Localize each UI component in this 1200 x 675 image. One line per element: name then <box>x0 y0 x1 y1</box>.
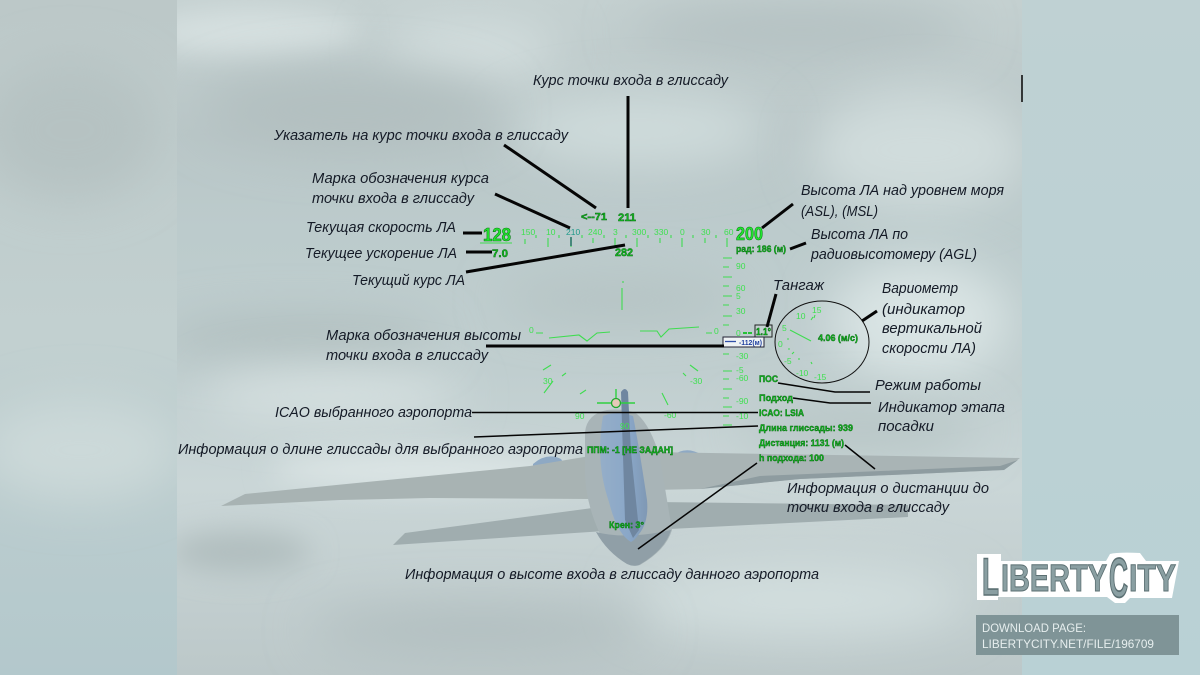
HUD: pitch ladder: 90 <box>736 261 746 271</box>
HUD: flight path marker <box>597 389 635 408</box>
HUD: readouts: 7.0 <box>492 248 508 260</box>
HUD: readouts: 282 <box>615 247 633 259</box>
annotation labels: скорости ЛА) <box>882 340 976 357</box>
annotation labels: точки входа в глиссаду <box>312 190 475 207</box>
annotation labels: Указатель на курс точки входа в глиссаду <box>273 127 569 144</box>
annotation labels: ICAO выбранного аэропорта <box>275 404 472 421</box>
variometer gauge: 0 <box>778 339 783 349</box>
HUD: pitch ladder: 5 <box>736 291 741 301</box>
HUD: pitch ladder: -10 <box>736 411 749 421</box>
HUD: readouts: <--71 <box>581 211 607 223</box>
variometer gauge: 10 <box>796 311 806 321</box>
HUD: heading tape: 210 <box>566 227 580 237</box>
download page box: DOWNLOAD PAGE: <box>982 621 1086 635</box>
HUD: readouts: 200 <box>736 224 763 244</box>
HUD: artificial horizon: -60 <box>664 410 677 420</box>
logo: LibertyCity <box>977 546 1179 609</box>
download page box <box>976 615 1179 655</box>
HUD: heading tape: 30 <box>701 227 711 237</box>
HUD: artificial horizon: 30 <box>543 376 553 386</box>
pitch readout box: 1.1° <box>756 327 771 338</box>
background: cloudy sky <box>140 0 1030 675</box>
annotation labels: Тангаж <box>773 277 825 294</box>
HUD: pitch ladder: 30 <box>736 306 746 316</box>
HUD: pitch ladder: 0 <box>736 328 741 338</box>
left wing <box>221 456 590 506</box>
HUD: heading tape: 240 <box>588 227 602 237</box>
annotation labels: Высота ЛА по <box>811 226 908 243</box>
HUD: heading tape: 0 <box>680 227 685 237</box>
annotation labels: Информация о дистанции до <box>787 480 989 497</box>
fuselage <box>585 410 672 566</box>
HUD: readouts: 211 <box>618 212 636 224</box>
logo: LibertyCity: L <box>982 548 999 607</box>
entry altitude marker box <box>723 337 764 347</box>
annotation labels: Текущая скорость ЛА <box>306 219 456 236</box>
annotation labels: Индикатор этапа <box>878 399 1005 416</box>
HUD: heading tape: 10 <box>546 227 556 237</box>
tail wing <box>393 507 605 545</box>
annotation labels <box>178 72 1005 583</box>
variometer gauge: 5 <box>782 323 787 333</box>
logo: LibertyCity: ITY <box>1129 558 1176 600</box>
fuselage blue panel <box>600 413 647 542</box>
entry altitude marker box: -112(м) <box>739 338 762 347</box>
annotation labels: точки входа в глиссаду <box>787 499 950 516</box>
HUD: pitch ladder: -60 <box>736 373 749 383</box>
annotation labels: Высота ЛА над уровнем моря <box>801 182 1004 199</box>
HUD: artificial horizon: 0 <box>714 326 719 336</box>
HUD: artificial horizon: 90 <box>575 411 585 421</box>
HUD: heading tape: 60 <box>724 227 734 237</box>
HUD: artificial horizon <box>529 281 719 431</box>
HUD: artificial horizon: 0 <box>529 325 534 335</box>
background: blurred side bands <box>0 0 177 675</box>
HUD: heading tape: 300 <box>632 227 646 237</box>
annotation labels: (ASL), (MSL) <box>801 203 878 220</box>
HUD: heading tape: 150 <box>521 227 535 237</box>
HUD: pitch ladder: -30 <box>736 351 749 361</box>
HUD: readouts: Дистанция: 1131 (м) <box>759 438 844 449</box>
annotation labels: Вариометр <box>882 280 958 297</box>
pitch readout box <box>743 325 772 338</box>
download page box: LIBERTYCITY.NET/FILE/196709 <box>982 637 1154 651</box>
HUD: heading tape: 330 <box>654 227 668 237</box>
logo: LibertyCity: C <box>1109 546 1128 609</box>
HUD: readouts: Подход <box>759 393 793 404</box>
HUD: readouts: 128 <box>483 225 511 245</box>
variometer gauge: -15 <box>814 372 827 382</box>
annotation labels: Марка обозначения высоты <box>326 327 521 344</box>
variometer gauge: -10 <box>796 368 809 378</box>
HUD: pitch ladder <box>723 258 749 425</box>
annotation labels: вертикальной <box>882 320 983 337</box>
annotation labels: Текущее ускорение ЛА <box>305 245 457 262</box>
annotation labels: Курс точки входа в глиссаду <box>533 72 729 89</box>
annotation labels: радиовысотомеру (AGL) <box>810 246 977 263</box>
annotation labels: посадки <box>878 418 935 435</box>
airplane seen from behind <box>221 389 1020 566</box>
annotation labels: (индикатор <box>882 301 965 318</box>
HUD: readouts: Крен: 3° <box>609 520 644 531</box>
HUD: pitch ladder: 60 <box>736 283 746 293</box>
variometer gauge <box>775 301 869 383</box>
annotation labels: Информация о длине глиссады для выбранного аэропорта <box>178 441 583 458</box>
annotation labels: Текущий курс ЛА <box>352 272 465 289</box>
HUD: artificial horizon: 90 <box>620 421 630 431</box>
annotation labels: Режим работы <box>875 377 981 394</box>
leader lines <box>463 75 1022 549</box>
HUD: heading tape <box>521 227 734 247</box>
HUD: readouts: ППМ: -1 [НЕ ЗАДАН] <box>587 445 673 455</box>
annotation labels: точки входа в глиссаду <box>326 347 489 364</box>
right wing <box>650 452 1020 490</box>
HUD: readouts <box>480 211 853 531</box>
annotation labels: Информация о высоте входа в глиссаду данного аэропорта <box>405 566 819 583</box>
variometer gauge: -5 <box>784 356 792 366</box>
logo: LibertyCity: IBERTY <box>1001 558 1107 600</box>
HUD: pitch ladder: -5 <box>736 365 744 375</box>
variometer gauge: 4.06 (м/с) <box>818 333 858 344</box>
annotation labels: Марка обозначения курса <box>312 170 489 187</box>
engine nacelles <box>533 450 707 467</box>
variometer gauge: 15 <box>812 305 822 315</box>
HUD: artificial horizon: -30 <box>690 376 703 386</box>
HUD: readouts: рад: 186 (м) <box>736 244 786 255</box>
HUD: pitch ladder: -90 <box>736 396 749 406</box>
HUD: heading tape: 3 <box>613 227 618 237</box>
tail fin <box>621 389 639 538</box>
HUD: readouts: Длина глиссады: 939 <box>759 423 853 434</box>
HUD: readouts: h подхода: 100 <box>759 453 824 464</box>
fuselage lower shade <box>596 530 671 566</box>
HUD: readouts: ICAO: LSIA <box>759 408 804 419</box>
HUD: readouts: ПОС <box>759 374 778 385</box>
